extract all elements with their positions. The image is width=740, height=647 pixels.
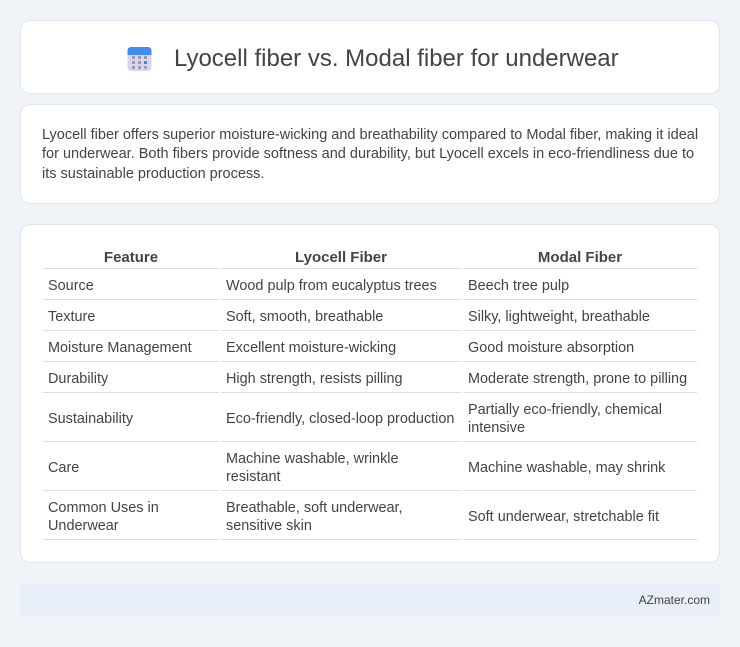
row: Moisture Management: Good moisture absorption: [468, 340, 634, 356]
title card: [20, 20, 720, 94]
row: Moisture Management: [48, 340, 634, 356]
summary text: for underwear. Both fibers provide softness and durability, but Lyocell excels in eco-friendliness due to: [42, 146, 694, 162]
row: Common Uses in Underwear: Common Uses in: [48, 500, 159, 516]
summary text: its sustainable production process.: [42, 166, 264, 182]
row: Common Uses in Underwear: sensitive skin: [226, 518, 312, 534]
row: Durability: Moderate strength, prone to pilling: [468, 371, 687, 387]
row: Durability: Durability: [48, 371, 108, 387]
summary text: Lyocell fiber offers superior moisture-wicking and breathability compared to Modal fiber, making it ideal: [42, 127, 698, 143]
row: Moisture Management: Moisture Management: [48, 340, 192, 356]
row: Texture: Silky, lightweight, breathable: [468, 309, 650, 325]
header: Feature: Feature: [104, 249, 158, 266]
summary card: [20, 104, 720, 204]
header: Lyocell Fiber: Lyocell Fiber: [295, 249, 387, 266]
row: Care: Machine washable, may shrink: [468, 460, 665, 476]
row: Common Uses in Underwear: Soft underwear, stretchable fit: [468, 509, 659, 525]
row: Source: Beech tree pulp: [468, 278, 569, 294]
row: Common Uses in Underwear: Underwear: [48, 518, 119, 534]
row: Sustainability: intensive: [468, 420, 525, 436]
row: Texture: Texture: [48, 309, 95, 325]
row: Source: Source: [48, 278, 94, 294]
row: Sustainability: Partially eco-friendly, chemical: [468, 402, 662, 418]
footer: source: AZmater.com: [639, 593, 710, 607]
row: Care: Machine washable, wrinkle: [226, 451, 399, 467]
row: Care: Care: [48, 460, 79, 476]
row: Common Uses in Underwear: Breathable, soft underwear,: [226, 500, 403, 516]
summary text: [42, 127, 698, 182]
row: Sustainability: Sustainability: [48, 411, 133, 427]
row: Source: [48, 278, 569, 294]
comparison table: [43, 249, 697, 540]
footer bar: [20, 583, 720, 617]
table card: [20, 224, 720, 563]
row: Care: [48, 451, 666, 485]
icon: calendar: [128, 47, 152, 71]
row: Care: resistant: [226, 469, 281, 485]
title: Lyocell fiber vs. Modal fiber for underwear: [174, 45, 619, 72]
row: Sustainability: [48, 402, 662, 436]
row: Durability: [48, 371, 687, 387]
row: Source: Wood pulp from eucalyptus trees: [226, 278, 437, 294]
row: Durability: High strength, resists pilling: [226, 371, 403, 387]
row: Texture: Soft, smooth, breathable: [226, 309, 383, 325]
header: Modal Fiber: Modal Fiber: [538, 249, 622, 266]
row: Sustainability: Eco-friendly, closed-loop production: [226, 411, 454, 427]
row: Moisture Management: Excellent moisture-wicking: [226, 340, 396, 356]
row: Common Uses in Underwear: [48, 500, 659, 534]
row: Texture: [48, 309, 650, 325]
